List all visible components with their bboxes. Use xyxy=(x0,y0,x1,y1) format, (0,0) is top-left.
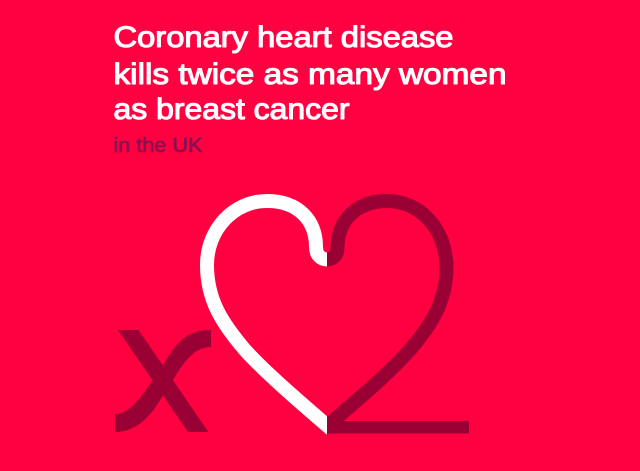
x straight stroke xyxy=(118,330,208,432)
title line 3: as breast cancer xyxy=(114,93,350,126)
subtitle: in the UK: in the UK xyxy=(114,135,203,157)
dark curve of the 2 xyxy=(320,201,446,432)
title line 1: Coronary heart disease xyxy=(114,21,454,54)
white left half of heart xyxy=(207,201,338,435)
title xyxy=(114,21,506,126)
title line 2: kills twice as many women xyxy=(114,58,506,91)
icon: multiplication x xyxy=(115,330,211,432)
infographic canvas xyxy=(114,25,505,436)
x curved stroke xyxy=(115,330,211,432)
heart chart: white half and dark half forming the number 2 xyxy=(207,201,469,435)
base bar of the 2 xyxy=(327,421,469,434)
